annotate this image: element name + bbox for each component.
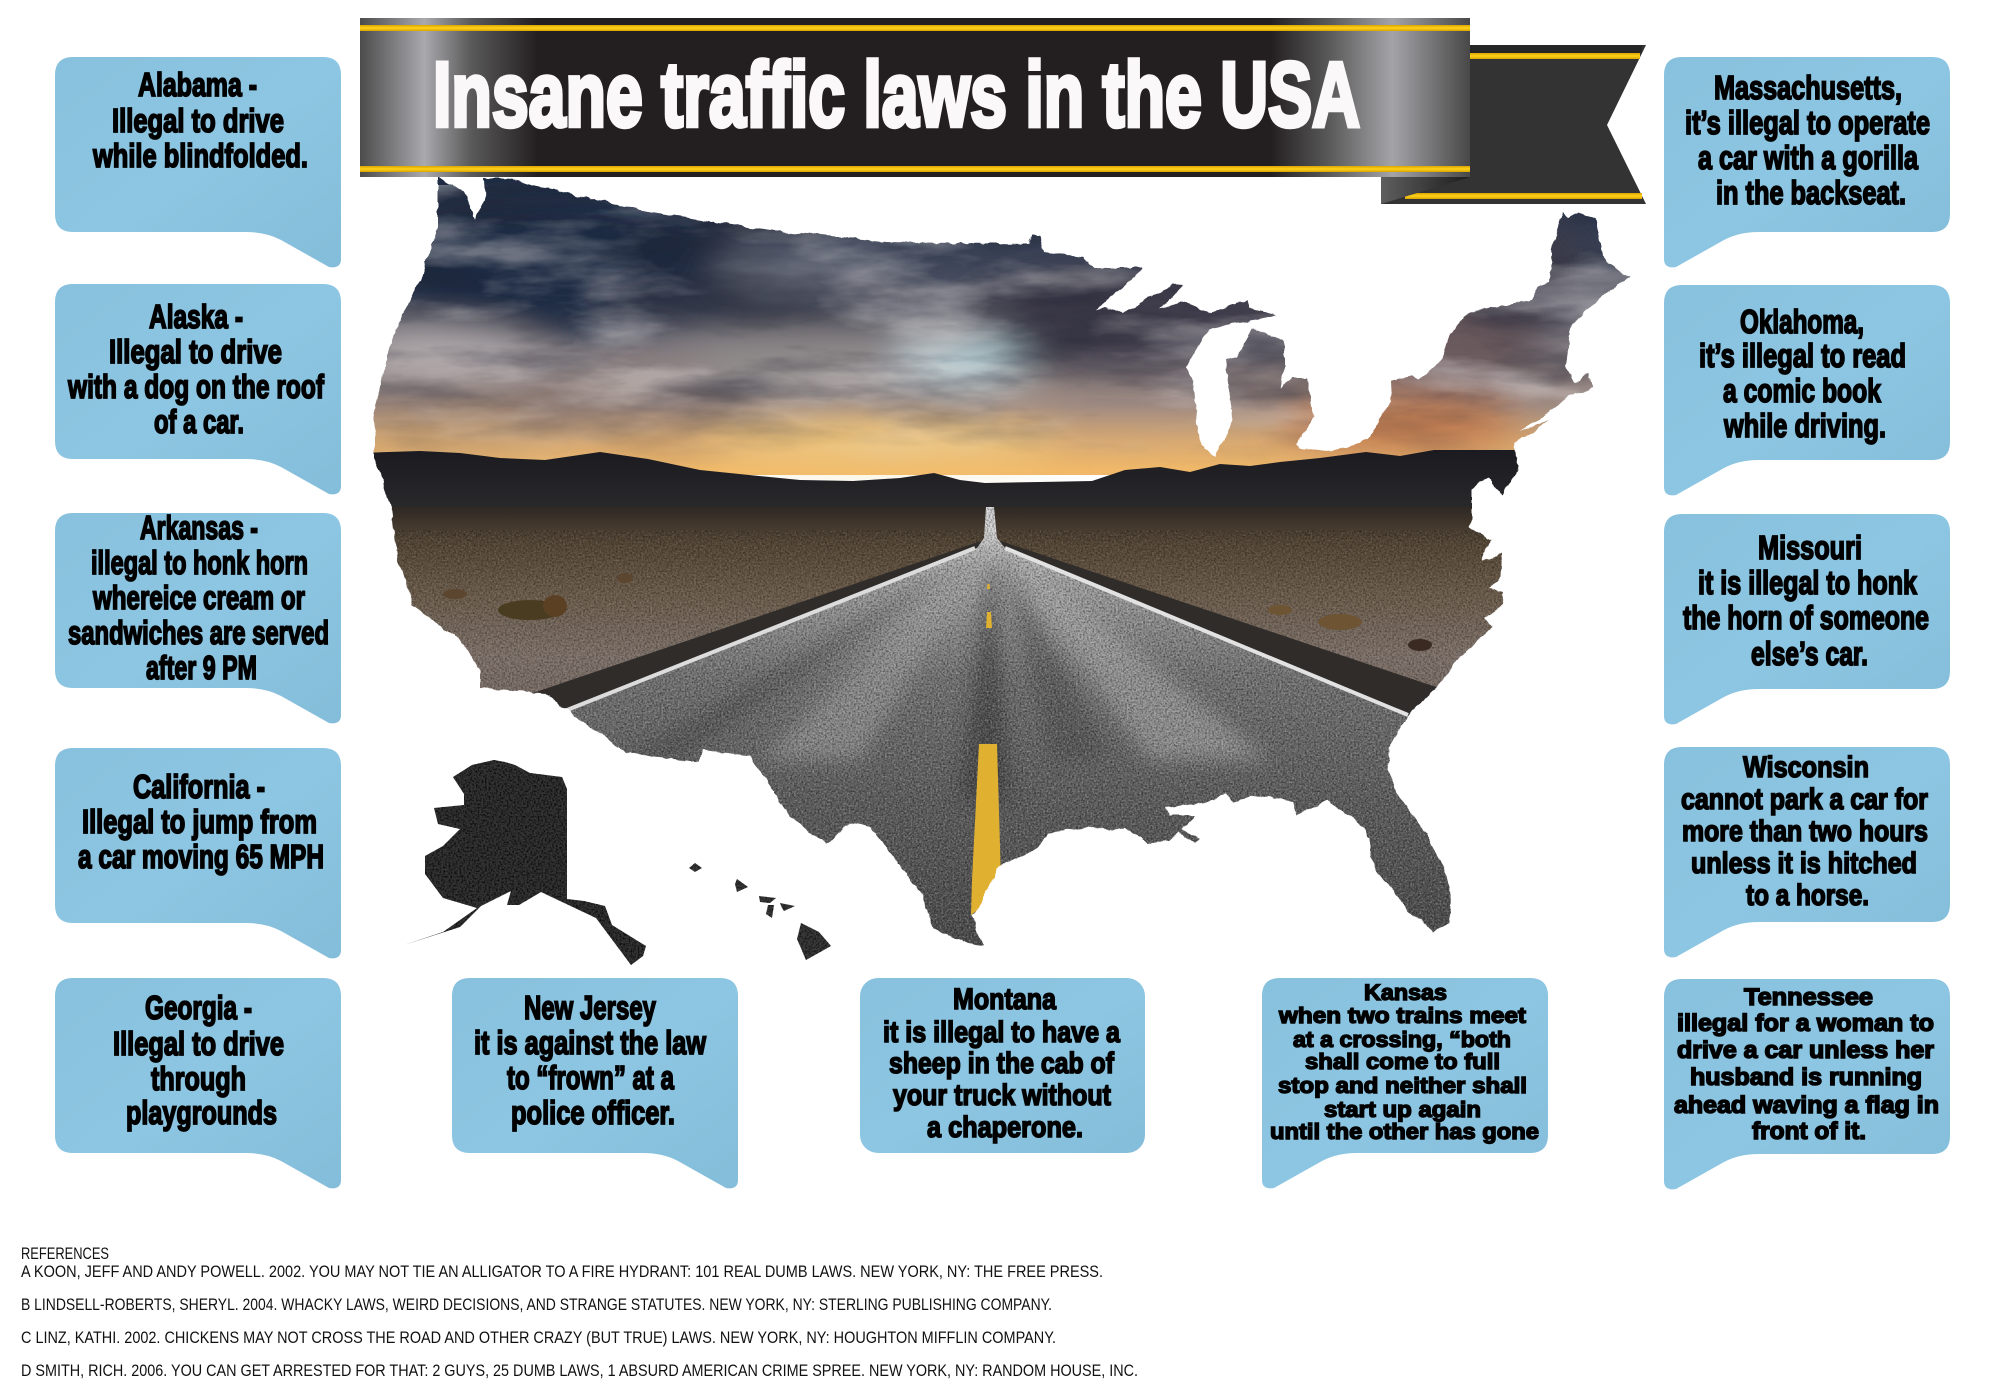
map: USA silhouette with road photo [374,177,1630,946]
panel: Kansas [1262,978,1548,1188]
text: Alaska: Illegal to drive [109,333,282,370]
text: Missouri: else’s car. [1751,635,1868,672]
banner ribbon [360,18,1646,204]
text: Georgia: playgrounds [126,1094,277,1131]
text: Alabama [92,66,308,174]
text: Massachusetts [1685,69,1930,211]
text: New Jersey [474,989,706,1131]
text: Kansas: until the other has gone [1270,1119,1539,1144]
text: Arkansas: whereice cream or [92,579,305,616]
desert ground [391,510,1504,694]
text: Massachusetts: in the backseat. [1716,174,1906,211]
yellow centre line [971,584,1001,915]
panel: Tennessee [1664,979,1950,1189]
panel: Missouri [1664,514,1950,724]
text: Oklahoma [1699,303,1906,444]
map: Hawaii [689,863,831,960]
text: Missouri: the horn of someone [1683,599,1929,636]
panel: Wisconsin [1664,747,1950,957]
text: Missouri: it is illegal to honk [1698,564,1917,601]
sky [350,170,1650,475]
text: Arkansas: Arkansas - [140,509,258,546]
ribbon fold [1381,177,1470,204]
text: Tennessee: Tennessee [1744,984,1873,1011]
text: Alaska: Alaska - [149,298,243,335]
references: C LINZ, KATHI. 2002. CHICKENS MAY NOT CROSS THE ROAD AND OTHER CRAZY (BUT TRUE) LAWS. NEW YORK, NY: HOUGHTON MIFFLIN COMPANY. [21,1328,1056,1347]
text: Massachusetts: it’s illegal to operate [1685,104,1930,141]
text: Missouri [1683,529,1929,672]
references: REFERENCES [21,1244,109,1263]
panel: California [55,748,341,958]
text: Wisconsin [1681,751,1928,912]
road surface [570,507,1451,946]
panel: Massachusetts [1664,57,1950,267]
references: B LINDSELL-ROBERTS, SHERYL. 2004. WHACKY LAWS, WEIRD DECISIONS, AND STRANGE STATUTES. NEW YORK, NY: STERLING PUBLISHING COMPANY. [21,1295,1052,1314]
text: New Jersey: police officer. [511,1094,675,1131]
text: Oklahoma: while driving. [1723,407,1886,444]
text: Massachusetts: Massachusetts, [1714,69,1902,106]
text: Tennessee: front of it. [1752,1118,1866,1145]
text: Tennessee: drive a car unless her [1677,1037,1934,1064]
mountains [374,450,1519,507]
text: California: Illegal to jump from [82,803,317,840]
text: Alabama: Alabama - [138,66,257,103]
references: A KOON, JEFF AND ANDY POWELL. 2002. YOU MAY NOT TIE AN ALLIGATOR TO A FIRE HYDRANT: 101 REAL DUMB LAWS. NEW YORK, NY: THE FREE PRESS. [21,1262,1103,1281]
text: Montana: sheep in the cab of [889,1047,1115,1080]
text: California: California - [133,768,265,805]
text: Oklahoma: Oklahoma, [1740,303,1864,340]
text: Kansas: Kansas [1364,980,1447,1005]
text: Alabama: Illegal to drive [112,102,284,139]
panel: Oklahoma [1664,285,1950,495]
text: Arkansas: after 9 PM [146,649,257,686]
text: Tennessee: illegal for a woman to [1677,1010,1934,1037]
panel: Georgia [55,978,341,1188]
panel: New Jersey [452,978,738,1188]
panel: Montana [860,978,1145,1153]
road shoulders [530,541,990,720]
text: Alabama: while blindfolded. [92,137,308,174]
text: California: a car moving 65 MPH [78,838,324,875]
text: Arkansas [68,509,329,686]
panel: Arkansas [55,509,341,723]
text: California [78,768,324,875]
road edge lines [562,548,975,712]
text: Georgia: Georgia - [145,989,252,1026]
text: Tennessee: husband is running [1690,1064,1922,1091]
ribbon main band [360,18,1470,177]
text: Missouri: Missouri [1758,529,1862,566]
text: Arkansas: illegal to honk horn [91,544,308,581]
text: Kansas: at a crossing, “both [1293,1027,1511,1052]
title: Insane traffic laws in the USA [433,44,1360,146]
text: Montana [883,983,1120,1144]
text: New Jersey: it is against the law [474,1024,706,1061]
text: Georgia: Illegal to drive [113,1025,284,1062]
text: Wisconsin: cannot park a car for [1681,783,1928,816]
references [21,1244,1138,1380]
text: Kansas: when two trains meet [1278,1003,1527,1028]
text: Alaska: of a car. [154,403,244,440]
text: Tennessee: ahead waving a flag in [1674,1092,1939,1119]
text: Montana: your truck without [893,1079,1111,1112]
text: Georgia: through [151,1060,246,1097]
text: Montana: a chaperone. [927,1111,1083,1144]
text: Tennessee [1674,984,1939,1145]
text: Arkansas: sandwiches are served [68,614,329,651]
text: Wisconsin: more than two hours [1682,815,1928,848]
text: Alaska: with a dog on the roof [67,368,325,405]
text: Wisconsin: Wisconsin [1743,751,1869,784]
text: New Jersey: to “frown” at a [507,1059,674,1096]
text: Georgia [113,989,284,1131]
text: Montana: it is illegal to have a [883,1016,1120,1049]
text: Kansas: shall come to full [1305,1049,1500,1074]
text: Wisconsin: to a horse. [1746,879,1869,912]
text: Kansas: stop and neither shall [1278,1073,1527,1098]
panel: Alabama [55,57,341,267]
map: Alaska [400,755,650,970]
ribbon tail [1381,45,1646,204]
text: Oklahoma: a comic book [1723,372,1881,409]
text: Kansas [1270,980,1539,1144]
text: New Jersey: New Jersey [524,989,656,1026]
text: Massachusetts: a car with a gorilla [1698,139,1918,176]
text: Alaska [67,298,325,440]
text: Montana: Montana [953,983,1056,1016]
text: Oklahoma: it’s illegal to read [1699,337,1906,374]
references: D SMITH, RICH. 2006. YOU CAN GET ARRESTED FOR THAT: 2 GUYS, 25 DUMB LAWS, 1 ABSURD AMERICAN CRIME SPREE. NEW YORK, NY: RANDOM HOUSE, INC. [21,1361,1138,1380]
text: Kansas: start up again [1324,1097,1481,1122]
text: Wisconsin: unless it is hitched [1691,847,1917,880]
panel: Alaska [55,284,341,494]
